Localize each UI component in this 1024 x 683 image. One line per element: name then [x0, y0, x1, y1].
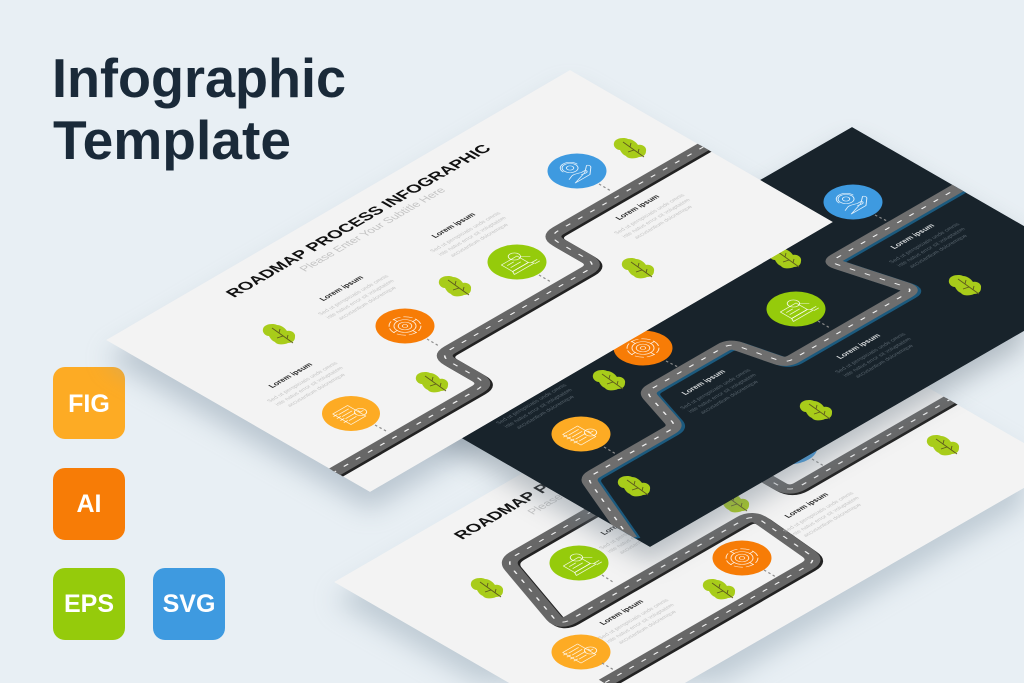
- step: blue marker: [793, 450, 823, 466]
- text block: Sed ut perspiciatis unde omnis: [782, 491, 856, 534]
- step: orange marker: [614, 330, 678, 367]
- text block: accusantium doloremque: [617, 610, 678, 645]
- text block: accusantium doloremque: [633, 205, 694, 240]
- text block: [303, 266, 405, 325]
- panel: bottom light slide: [334, 387, 1024, 683]
- step: orange marker: [376, 308, 439, 346]
- text block: iste natus error sit voluptatem: [437, 216, 509, 257]
- text block: iste natus error sit voluptatem: [503, 388, 575, 429]
- text block: accusantium doloremque: [854, 344, 915, 379]
- step: yellow marker: [552, 416, 616, 454]
- text block: Sed ut perspiciatis unde omnis: [266, 361, 340, 404]
- badge: AI: [53, 468, 125, 540]
- text block: iste natus error sit voluptatem: [605, 603, 677, 644]
- badge: SVG: SVG: [163, 590, 215, 618]
- text block: Sed ut perspiciatis unde omnis: [834, 332, 908, 375]
- tree: [770, 250, 802, 268]
- top slide title: ROADMAP PROCESS INFOGRAPHIC: [223, 142, 496, 300]
- step: green marker: [766, 292, 830, 328]
- text block: accusantium doloremque: [618, 520, 679, 555]
- text block: accusantium doloremque: [908, 234, 969, 269]
- text block: Lorem ipsum: [598, 508, 647, 536]
- road: bottom slide: [502, 396, 958, 683]
- tree: [723, 496, 750, 512]
- title: Infographic: [52, 47, 346, 109]
- text block: iste natus error sit voluptatem: [790, 496, 862, 537]
- tree: [614, 138, 646, 158]
- text block: accusantium doloremque: [286, 373, 347, 408]
- badge: SVG: [153, 568, 225, 640]
- bottom slide subtitle: Please Enter Your Subtitle Here: [525, 429, 677, 517]
- text block: Lorem ipsum: [429, 211, 478, 239]
- text block: Lorem ipsum: [266, 361, 315, 389]
- tree: [471, 578, 503, 598]
- tree: [416, 372, 448, 392]
- text block: Lorem ipsum: [613, 193, 662, 221]
- text block: Lorem ipsum: [834, 332, 883, 360]
- text block: accusantium doloremque: [699, 380, 760, 415]
- panel shadow: top slide: [106, 88, 833, 510]
- panel shadow: dark slide: [387, 142, 1024, 562]
- panel: dark slide: [462, 127, 1024, 547]
- text block: iste natus error sit voluptatem: [842, 337, 914, 378]
- text block: iste natus error sit voluptatem: [606, 513, 678, 554]
- road: dark slide: [582, 184, 966, 539]
- step: green marker: [550, 546, 613, 582]
- text block: accusantium doloremque: [515, 395, 576, 430]
- tree: [263, 324, 295, 344]
- badge: FIG: FIG: [68, 390, 110, 418]
- step: yellow marker: [552, 634, 614, 670]
- text block: iste natus error sit voluptatem: [687, 373, 759, 414]
- text block: Lorem ipsum: [317, 274, 366, 302]
- text block: accusantium doloremque: [802, 503, 863, 538]
- text block: Sed ut perspiciatis unde omnis: [317, 274, 391, 317]
- badge: FIG: [53, 367, 125, 439]
- tree: [927, 435, 959, 455]
- text block: Sed ut perspiciatis unde omnis: [679, 368, 753, 411]
- text block: Sed ut perspiciatis unde omnis: [597, 598, 671, 641]
- badge: EPS: EPS: [64, 590, 114, 618]
- tree: [618, 476, 650, 496]
- text block: Lorem ipsum: [495, 383, 544, 411]
- tree: [949, 275, 981, 295]
- text block: [252, 353, 354, 412]
- panel: top light slide: [106, 70, 833, 492]
- step: yellow marker: [322, 396, 388, 432]
- text block: accusantium doloremque: [449, 223, 510, 258]
- panel shadow: bottom slide: [334, 331, 1024, 683]
- tree: [593, 370, 625, 390]
- tree: [622, 258, 654, 278]
- text block: [415, 203, 517, 262]
- badge: AI: AI: [76, 490, 102, 518]
- step: green marker: [488, 244, 551, 282]
- text block: accusantium doloremque: [337, 286, 398, 321]
- text block: [599, 185, 701, 244]
- step: orange marker: [712, 540, 776, 577]
- tree: [439, 276, 471, 296]
- text block: [599, 526, 642, 554]
- road: top slide: [329, 144, 712, 476]
- step: blue marker: [824, 184, 887, 221]
- text block: Sed ut perspiciatis unde omnis: [429, 211, 503, 254]
- title: [52, 47, 346, 171]
- tree: [703, 579, 735, 599]
- text block: Lorem ipsum: [679, 368, 728, 396]
- text block: iste natus error sit voluptatem: [325, 279, 397, 320]
- text block: iste natus error sit voluptatem: [621, 198, 693, 239]
- text block: iste natus error sit voluptatem: [274, 366, 346, 407]
- step: blue marker: [548, 154, 611, 191]
- tree: [800, 400, 832, 420]
- text block: iste natus error sit voluptatem: [896, 227, 968, 268]
- text block: Sed ut perspiciatis unde omnis: [613, 193, 687, 236]
- text block: Sed ut perspiciatis unde omnis: [888, 222, 962, 265]
- text block: Lorem ipsum: [888, 222, 937, 250]
- title: Template: [53, 109, 291, 171]
- text block: Sed ut perspiciatis unde omnis: [495, 383, 569, 426]
- text block: Lorem ipsum: [782, 491, 831, 519]
- text block: Sed ut perspiciatis unde omnis: [598, 508, 672, 551]
- text block: Lorem ipsum: [597, 598, 646, 626]
- top slide subtitle: Please Enter Your Subtitle Here: [297, 186, 449, 274]
- bottom slide title: ROADMAP PROCESS INFOGRAPHIC: [451, 384, 724, 542]
- badge: EPS: [53, 568, 125, 640]
